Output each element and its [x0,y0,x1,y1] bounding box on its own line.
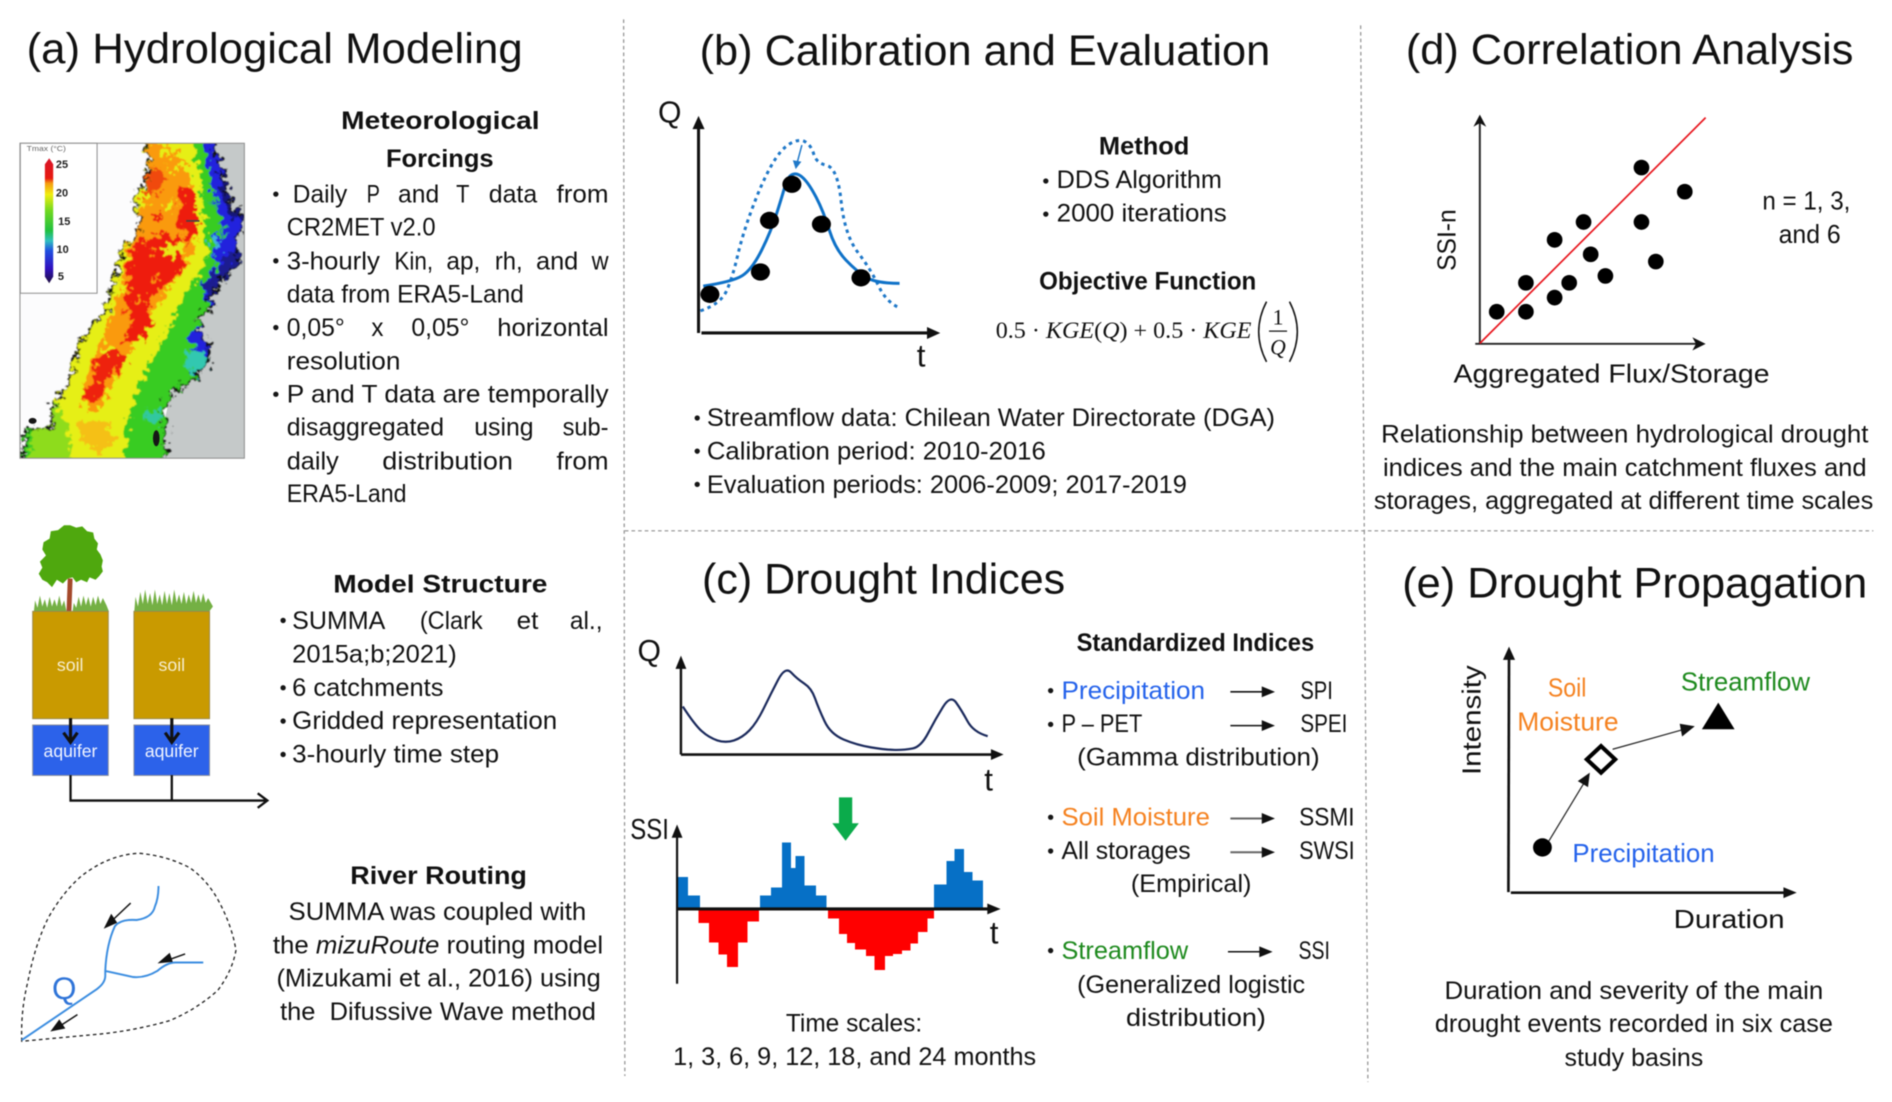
text block: Meteorological Forcings bullets: T [456,182,469,209]
map legend: Tmax colour bar: 15 [58,216,70,228]
heading: Meteorological Forcings [341,108,540,173]
text block: Meteorological Forcings bullets: from [557,448,609,475]
text block: Meteorological Forcings bullets: P and T data are temporally [287,382,609,409]
text block: River Routing: the Difussive Wave method [280,999,596,1026]
text block: Meteorological Forcings bullets: 3-hourly [287,248,381,275]
text block: data and periods bullets: Streamflow data: Chilean Water Directorate (DGA) [707,405,1275,432]
text block: Time scales: Time scales: [786,1010,922,1037]
list: storage indices [1048,805,1355,898]
diagram: river catchment [22,853,236,1041]
text block: propagation description [1435,978,1833,1072]
map legend: Tmax colour bar: 5 [58,271,64,283]
text block: Model Structure bullets: 6 catchments [292,675,443,702]
arrow: upper tributary [105,903,131,927]
axis: duration [1511,887,1797,898]
axis: aggregated flux [1475,337,1706,350]
text block: Model Structure bullets: 2015a;b;2021) [292,641,457,668]
text block: Model Structure bullets: Gridded representation [292,708,557,735]
text block: Model Structure bullets: et [517,608,538,635]
title: panel d: (d) Correlation Analysis [1406,26,1853,73]
text block: Meteorological Forcings bullets: w [591,248,609,275]
icon: tree [34,525,109,611]
catchment outline [22,853,236,1041]
text block: Model Structure bullets: 3-hourly time step [292,741,499,768]
curves and observations [700,140,900,311]
note: n values: n = 1, 3, [1762,187,1850,215]
panel: (a) Hydrological Modeling [10,25,609,1041]
heading: River Routing: River Routing [350,863,527,890]
text block: River Routing: the mizuRoute routing model [273,932,603,959]
title: panel b: (b) Calibration and Evaluation [700,27,1270,74]
text block: Method: 2000 iterations [1057,200,1227,227]
list: precipitation indices: Precipitation [1061,678,1205,705]
arrow: precipitation to soil moisture [1549,773,1590,841]
label: Soil Moisture: Moisture [1517,708,1619,736]
list: streamflow index: SSI [1299,938,1330,965]
text block: Model Structure bullets: (Clark [420,608,483,635]
list: streamflow index [1048,938,1330,1032]
label: Soil Moisture [1517,675,1619,736]
chart: SSI bars [630,814,1001,984]
arrow: lower tributary [160,954,185,962]
text block: Meteorological Forcings bullets: using [474,414,534,441]
map legend: Tmax colour bar: 25 [56,159,68,171]
box: aquifer left [33,725,108,775]
title: panel c: (c) Drought Indices [702,556,1065,603]
text block: Meteorological Forcings bullets: P [367,182,380,209]
text block: Meteorological Forcings bullets: disaggregated [287,414,444,441]
text block: Method: DDS Algorithm [1057,167,1222,194]
text block: correlation description [1374,422,1873,515]
chart: hydrograph calibration [658,96,940,374]
note: n values [1762,187,1850,249]
text block: River Routing: SUMMA was coupled with [289,899,586,926]
text block: Meteorological Forcings bullets: ERA5-Land [287,481,407,508]
text block: Model Structure bullets: al., [570,608,603,635]
text block: Meteorological Forcings bullets: data from ERA5-Land [287,282,524,309]
box: aquifer left: aquifer [44,741,98,761]
list: streamflow index: Streamflow [1061,938,1188,965]
regression line [1480,118,1706,343]
panel: (d) Correlation Analysis [1374,26,1873,515]
text block: Meteorological Forcings bullets: 0,05° [287,315,345,342]
list: storage indices: Soil Moisture [1061,805,1210,832]
box: aquifer right: aquifer [145,741,199,761]
list: streamflow index: (Generalized logistic [1077,972,1305,999]
arrow: aquifer outflow [71,775,267,808]
axis: SSI [672,825,682,984]
note: n values: and 6 [1779,221,1841,249]
text block: Meteorological Forcings bullets: rh, [495,248,523,275]
text block: Meteorological Forcings bullets: Kin, [394,248,433,275]
arrow: soil moisture to streamflow [1613,724,1695,749]
icon: grass [134,590,213,611]
text block: data and periods bullets: Evaluation periods: 2006-2009; 2017-2019 [707,472,1187,499]
list: precipitation indices: P – PET [1061,711,1142,738]
list: storage indices: All storages [1061,838,1191,865]
bars: positive [678,843,983,909]
text block: Objective Function formula [996,269,1297,362]
heading: Meteorological Forcings: Meteorological [341,108,540,135]
map: Tmax heat map of Chile [18,142,246,460]
text block: data and periods bullets [695,405,1275,499]
label: t axis: t [990,915,999,950]
axis: Q [693,116,705,333]
text block: Meteorological Forcings bullets: data [489,182,537,209]
title: panel a: (a) Hydrological Modeling [27,25,523,72]
text block: Meteorological Forcings bullets [273,182,609,508]
text block: Meteorological Forcings bullets: Daily [293,182,348,209]
river network [22,886,203,1040]
text block: Meteorological Forcings bullets: 0,05° [411,315,469,342]
text block: Meteorological Forcings bullets: daily [287,448,339,475]
text block: Meteorological Forcings bullets: from [557,182,609,209]
bars: negative [698,909,934,970]
map legend: Tmax colour bar [20,143,97,293]
label: Aggregated Flux/Storage: Aggregated Flux/Storage [1454,360,1770,388]
text block: Objective Function formula: 1 [1273,306,1283,330]
box: aquifer right [134,725,210,775]
text block: River Routing [273,899,603,1026]
heading: Standardized Indices: Standardized Indices [1077,630,1314,657]
diagram: model structure soil columns [33,525,267,808]
text block: propagation description: Duration and severity of the main [1444,978,1823,1005]
panel: (b) Calibration and Evaluation [658,27,1297,499]
panel: (c) Drought Indices [630,556,1355,1071]
arrow: soil to aquifer right [165,718,179,742]
text block: Meteorological Forcings bullets: and [398,182,439,209]
box: soil right: soil [158,655,185,675]
text block: Time scales: 1, 3, 6, 9, 12, 18, and 24 months [673,1044,1036,1071]
axis: t [681,749,1004,760]
list: storage indices: (Empirical) [1131,871,1251,898]
text block: correlation description: Relationship between hydrological drought [1381,422,1869,449]
marker: precipitation [1533,838,1552,857]
list: storage indices: SSMI [1299,805,1355,832]
chart: propagation diagram [1458,647,1810,934]
axis: Q [675,656,686,755]
text block: correlation description: storages, aggregated at different time scales [1374,488,1873,515]
arrow: green transformation arrow [832,797,859,841]
label: Intensity: Intensity [1458,665,1486,775]
text block: Objective Function formula: 0.5 · KGE(Q) + 0.5 · KGE [996,318,1251,343]
text block: propagation description: study basins [1565,1045,1703,1072]
axis: SSI-n [1473,115,1486,344]
text block: River Routing: (Mizukami et al., 2016) using [276,966,601,993]
text block: Meteorological Forcings bullets: resolution [287,348,400,375]
label: Precipitation: Precipitation [1572,840,1715,868]
label: Q: Q [52,970,76,1006]
text block: propagation description: drought events recorded in six case [1435,1011,1833,1038]
text block: Meteorological Forcings bullets: distribution [382,448,513,475]
panel: (e) Drought Propagation [1402,560,1867,1072]
list: precipitation indices [1048,678,1347,771]
text block: Objective Function formula: Q [1270,336,1286,360]
chart: Q streamflow series [638,635,1004,798]
list: streamflow index: distribution) [1126,1005,1266,1032]
label: Q axis: Q [638,635,661,668]
text block: Meteorological Forcings bullets: sub- [563,414,609,441]
arrow: outlet [52,1015,77,1030]
label: t axis: t [917,339,926,374]
text block: Method: Method [1099,133,1189,160]
arrow: soil to aquifer left [64,718,77,742]
data points [1489,160,1693,320]
text block: Method [1043,133,1227,227]
list: storage indices: SWSI [1299,838,1355,865]
axis: t [677,904,1001,914]
label: SSI-n: SSI-n [1433,209,1461,271]
label: Q axis: Q [658,96,681,129]
heading: Meteorological Forcings: Forcings [386,146,494,173]
text block: Model Structure bullets: SUMMA [292,608,386,635]
list: precipitation indices: SPEI [1300,711,1347,738]
text block: Meteorological Forcings bullets: ap, [446,248,480,275]
label: t axis: t [984,763,993,798]
axis: intensity [1503,647,1515,892]
streamflow line [683,671,988,750]
label: Duration: Duration [1674,906,1785,934]
box: soil right [134,611,210,719]
text block: Meteorological Forcings bullets: horizontal [497,315,609,342]
text block: Model Structure bullets [280,608,603,768]
text block: Meteorological Forcings bullets: x [371,315,384,342]
box: soil left [33,611,108,719]
text block: Meteorological Forcings bullets: and [536,248,578,275]
heading: Model Structure: Model Structure [333,572,547,599]
map legend: Tmax colour bar: 20 [56,188,68,200]
label: SSI: SSI [630,814,669,846]
text block: Meteorological Forcings bullets: CR2MET v2.0 [287,214,436,241]
list: precipitation indices: SPI [1300,678,1333,705]
text block: correlation description: indices and the main catchment fluxes and [1383,455,1867,482]
marker: streamflow [1702,703,1735,729]
box: soil left: soil [57,655,83,675]
list: precipitation indices: (Gamma distribution) [1077,744,1320,771]
label: Soil Moisture: Soil [1548,675,1586,703]
text block: data and periods bullets: Calibration period: 2010-2016 [707,439,1046,466]
title: panel e: (e) Drought Propagation [1402,560,1867,607]
marker: soil moisture [1587,746,1615,773]
chart: scatter plot [1433,115,1770,388]
axis: t [701,327,940,339]
text block: Objective Function formula: Objective Function [1039,269,1256,296]
text block: Time scales [673,1010,1036,1071]
map legend: Tmax colour bar: Tmax (°C) [27,144,66,153]
label: Streamflow: Streamflow [1681,669,1810,697]
map legend: Tmax colour bar: 10 [57,244,69,256]
